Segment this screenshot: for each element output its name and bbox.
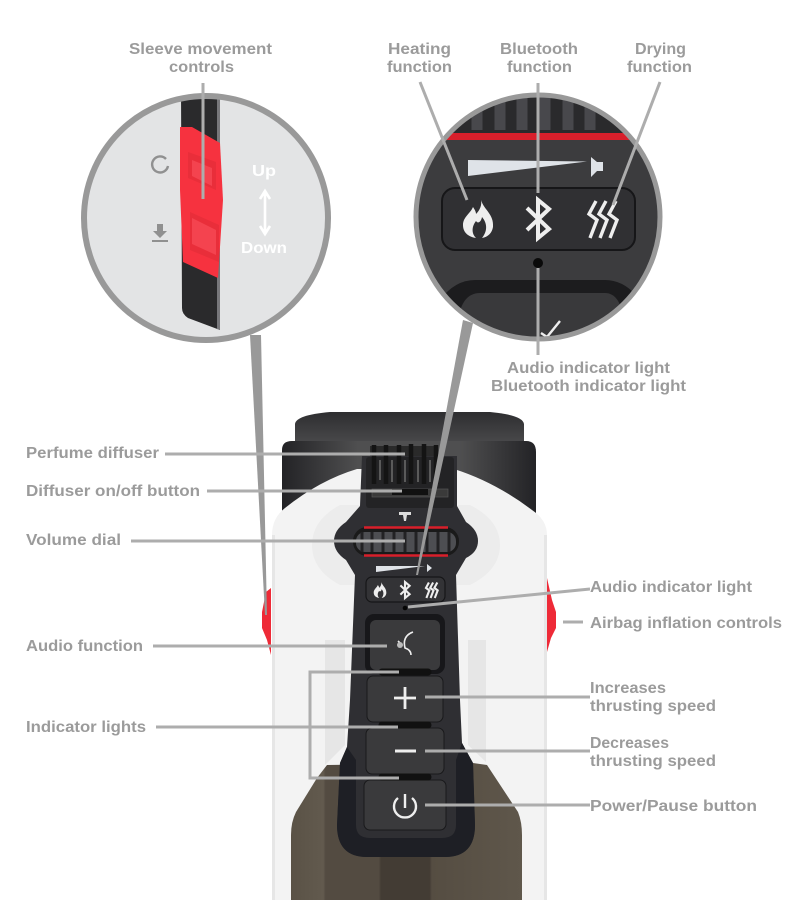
label: drying function [627, 41, 692, 76]
label: audio indicator light: Audio indicator light [590, 579, 753, 596]
small bluetooth [400, 582, 410, 598]
small drying [426, 582, 438, 598]
minus button [366, 728, 444, 774]
wedge icon [468, 157, 603, 177]
tank [291, 763, 522, 900]
down label: Down [241, 240, 287, 257]
rear dark housing [282, 441, 536, 520]
label: bluetooth function [500, 41, 578, 76]
label: drying function: Drying [635, 41, 686, 58]
drying icon [589, 201, 617, 238]
indicator hole [533, 258, 543, 268]
diffuser grille [366, 444, 454, 508]
white shell [272, 469, 547, 900]
label: heating function [387, 41, 452, 76]
label: increases thrusting speed: thrusting speed [590, 698, 716, 715]
label: sleeve movement controls: Sleeve movement [129, 41, 273, 58]
red slider [180, 127, 223, 278]
connector: right circle to panel [416, 320, 473, 575]
side button right [547, 578, 556, 652]
label: heating function: Heating [388, 41, 451, 58]
label: airbag inflation controls: Airbag inflation controls [590, 615, 782, 632]
shell shading [272, 535, 547, 900]
download icon [152, 224, 168, 242]
power button [364, 780, 446, 830]
audio button [365, 614, 445, 674]
volume dial [353, 527, 459, 556]
up label: Up [252, 163, 276, 180]
top cap [295, 412, 524, 441]
volume wedge [376, 564, 432, 572]
label: sleeve movement controls [129, 41, 273, 76]
label: decreases thrusting speed: thrusting speed [590, 753, 716, 770]
label: heating function: function [387, 59, 452, 76]
plus button [367, 676, 443, 722]
dial side recess [312, 505, 500, 585]
label: drying function: function [627, 59, 692, 76]
control strip [334, 456, 478, 857]
label: audio function: Audio function [26, 638, 143, 655]
leader lines [131, 82, 660, 805]
small flame [374, 582, 386, 598]
label: indicator lights: Indicator lights [26, 719, 146, 736]
zoom circle: function panel [414, 92, 662, 342]
label: bluetooth function: function [507, 59, 572, 76]
label: perfume diffuser: Perfume diffuser [26, 445, 159, 462]
label: bluetooth function: Bluetooth [500, 41, 578, 58]
flame icon [463, 200, 493, 238]
small function panel [366, 577, 445, 602]
label: audio and bluetooth indicator lights: Audio indicator light [507, 360, 671, 377]
label: decreases thrusting speed [590, 735, 716, 770]
up-down arrow [260, 191, 270, 234]
label: increases thrusting speed: Increases [590, 680, 666, 697]
panel [442, 188, 635, 250]
connector: left circle to side button [250, 335, 267, 615]
zoom circle: sleeve movement controls [84, 90, 328, 340]
device body [262, 412, 556, 900]
rotate icon [152, 156, 168, 172]
label: power button: Power/Pause button [590, 798, 757, 815]
side button left [262, 588, 271, 655]
label: volume dial: Volume dial [26, 532, 121, 549]
label: sleeve movement controls: controls [169, 59, 234, 76]
label: diffuser button: Diffuser on/off button [26, 483, 200, 500]
funnel icon [399, 512, 411, 521]
bluetooth icon [527, 200, 549, 238]
label: audio and bluetooth indicator lights: Bluetooth indicator light [491, 378, 687, 395]
strip lower band [337, 743, 475, 857]
label: decreases thrusting speed: Decreases [590, 735, 669, 752]
label: audio and bluetooth indicator lights [491, 360, 687, 395]
sleeve slot [180, 90, 223, 330]
indicator dot [403, 606, 407, 610]
indicator light slots [382, 672, 428, 777]
label: increases thrusting speed [590, 680, 716, 715]
lower button [446, 280, 632, 308]
